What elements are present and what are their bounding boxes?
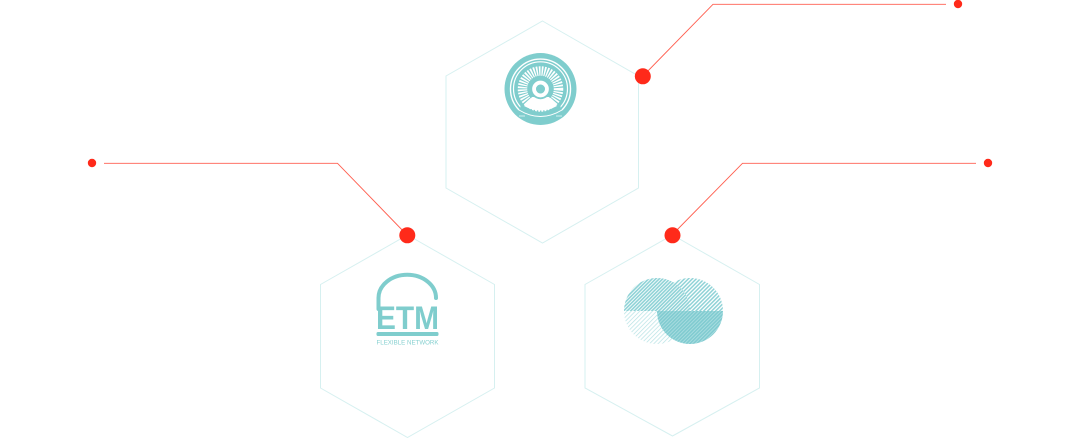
connector: left hexagon callout: [88, 159, 415, 243]
panel: left hexagon: [320, 235, 494, 438]
icon: ETM flexible network logo: [376, 275, 439, 346]
connector: top hexagon callout: [635, 0, 962, 84]
panel: right hexagon: [585, 235, 760, 436]
connector: right hexagon callout: [664, 159, 992, 243]
panel: top hexagon: [446, 21, 638, 243]
icon: round badge with rays: [504, 53, 576, 125]
icon: ETM flexible network logo: ETM: [376, 300, 439, 336]
icon: ETM flexible network logo: FLEXIBLE NETWORK: [376, 340, 439, 346]
icon: overlapping hatched circles: [624, 278, 723, 344]
